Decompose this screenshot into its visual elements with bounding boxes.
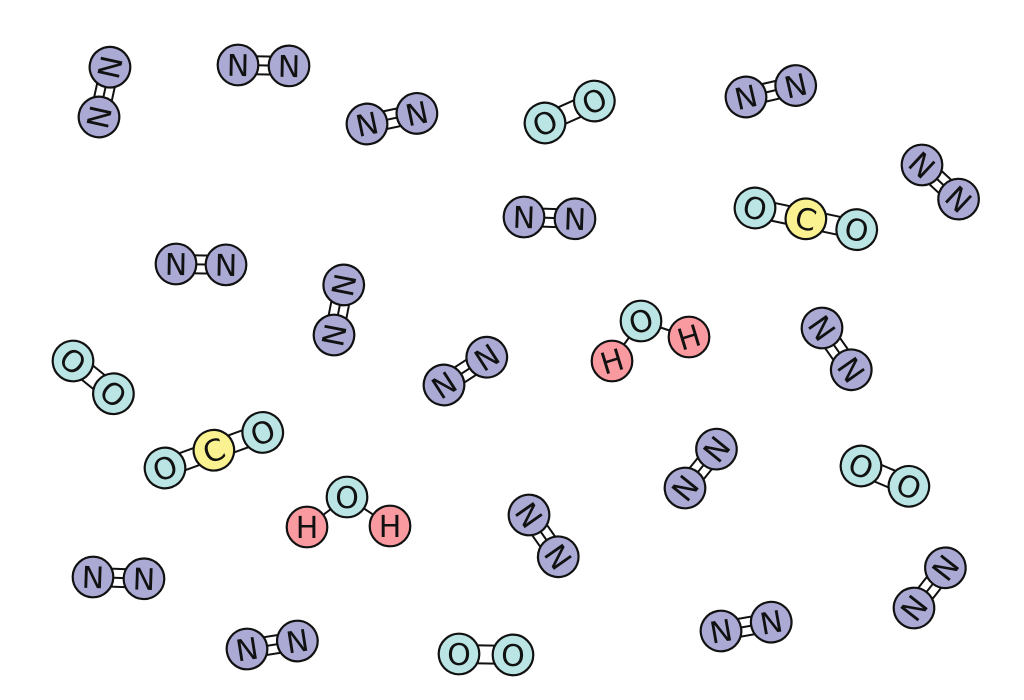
molecule: N2 right xyxy=(794,300,880,398)
molecule: N2 upper centre-left: N xyxy=(403,95,432,134)
molecule: N2 centre xyxy=(503,196,596,240)
molecule: N2 far right xyxy=(893,136,987,228)
molecule: N2 bottom left: N xyxy=(81,561,105,596)
molecule: N2 bottom left: N xyxy=(132,562,156,598)
molecule: H2O lower left: H xyxy=(379,510,401,545)
molecule: H2O centre right: H xyxy=(674,318,705,358)
molecule: H2O centre right: H xyxy=(597,342,628,382)
molecule: CO2 upper right xyxy=(731,184,881,254)
molecule: N2 vertical centre-left: N xyxy=(326,271,365,300)
molecule: N2 vertical centre-left xyxy=(310,261,368,359)
molecule: N2 bottom right: N xyxy=(707,613,735,652)
molecule: N2 top right: N xyxy=(781,67,811,107)
molecule: N2 bottom: N xyxy=(233,631,261,670)
molecule: CO2 upper right: O xyxy=(841,212,872,251)
molecule: O2 bottom centre xyxy=(438,633,534,676)
molecule: N2 lower centre-right: N xyxy=(666,469,707,509)
molecule: N2 left: N xyxy=(214,249,237,284)
molecule: CO2 upper right: C xyxy=(792,201,819,240)
molecule: H2O centre right: O xyxy=(625,302,658,343)
molecule: CO2 upper right: O xyxy=(739,190,770,229)
molecule: N2 lower centre: N xyxy=(536,538,578,577)
molecule: N2 centre: N xyxy=(563,202,587,238)
molecule: N2 top: N xyxy=(277,50,300,85)
molecule: H2O lower left: O xyxy=(335,481,359,516)
molecule: N2 mid centre: N xyxy=(426,365,464,407)
molecule: N2 bottom: N xyxy=(284,623,311,662)
molecule: O2 top centre: O xyxy=(577,82,613,123)
molecule: N2 bottom right: N xyxy=(757,604,786,643)
molecule: N2 lower centre-right: N xyxy=(697,430,738,470)
molecule: N2 bottom right xyxy=(697,599,795,655)
molecule: O2 left xyxy=(44,332,142,422)
molecule: N2 top left vertical: N xyxy=(81,103,120,132)
molecule: CO2 lower left xyxy=(139,406,289,494)
molecule: N2 far right: N xyxy=(937,180,978,221)
molecule: N2 mid centre: N xyxy=(469,338,507,379)
molecule: N2 far bottom right: N xyxy=(926,549,967,588)
molecule: N2 top left vertical xyxy=(75,43,134,141)
molecule: O2 left: O xyxy=(52,341,92,383)
molecule: N2 top right: N xyxy=(731,79,761,118)
molecule: O2 lower right: O xyxy=(891,467,926,508)
molecule: CO2 lower left: O xyxy=(246,413,280,454)
molecule: H2O lower left xyxy=(287,477,410,547)
molecule: N2 right: N xyxy=(829,351,871,390)
molecule: N2 far right: N xyxy=(901,146,941,187)
molecule: N2 lower centre xyxy=(501,487,587,585)
molecule: N2 vertical centre-left: N xyxy=(316,321,355,350)
molecule: N2 left: N xyxy=(164,248,188,283)
molecule: O2 lower right xyxy=(834,439,935,513)
molecule: N2 lower centre: N xyxy=(507,497,549,535)
molecule: CO2 lower left: C xyxy=(199,432,230,472)
molecule: O2 top centre: O xyxy=(528,104,564,145)
molecule: H2O lower left: H xyxy=(296,511,318,546)
molecule: O2 top centre xyxy=(518,74,621,150)
molecule: N2 top: N xyxy=(226,49,250,84)
molecule: O2 bottom centre: O xyxy=(447,638,471,673)
molecule: H2O centre right xyxy=(592,301,709,382)
molecule: N2 top xyxy=(217,44,310,87)
molecule: N2 bottom xyxy=(224,618,321,672)
molecule: N2 bottom left xyxy=(72,556,165,600)
molecule: N2 lower centre-right xyxy=(656,421,745,517)
molecule: O2 bottom centre: O xyxy=(501,639,525,674)
molecule: O2 left: O xyxy=(92,374,133,416)
molecule: O2 lower right: O xyxy=(843,447,878,488)
molecule: N2 upper centre-left xyxy=(343,89,441,148)
molecule: N2 far bottom right: N xyxy=(894,589,936,629)
molecule: N2 left xyxy=(155,243,247,286)
molecule: N2 far bottom right xyxy=(886,539,974,636)
molecule: CO2 lower left: O xyxy=(148,449,183,490)
molecule: N2 upper centre-left: N xyxy=(353,106,382,145)
molecule: N2 top left vertical: N xyxy=(92,53,131,82)
molecule: N2 centre: N xyxy=(512,201,536,236)
molecule: N2 right: N xyxy=(800,310,842,348)
molecule: N2 top right xyxy=(722,61,820,121)
molecule: N2 mid centre xyxy=(416,329,515,413)
